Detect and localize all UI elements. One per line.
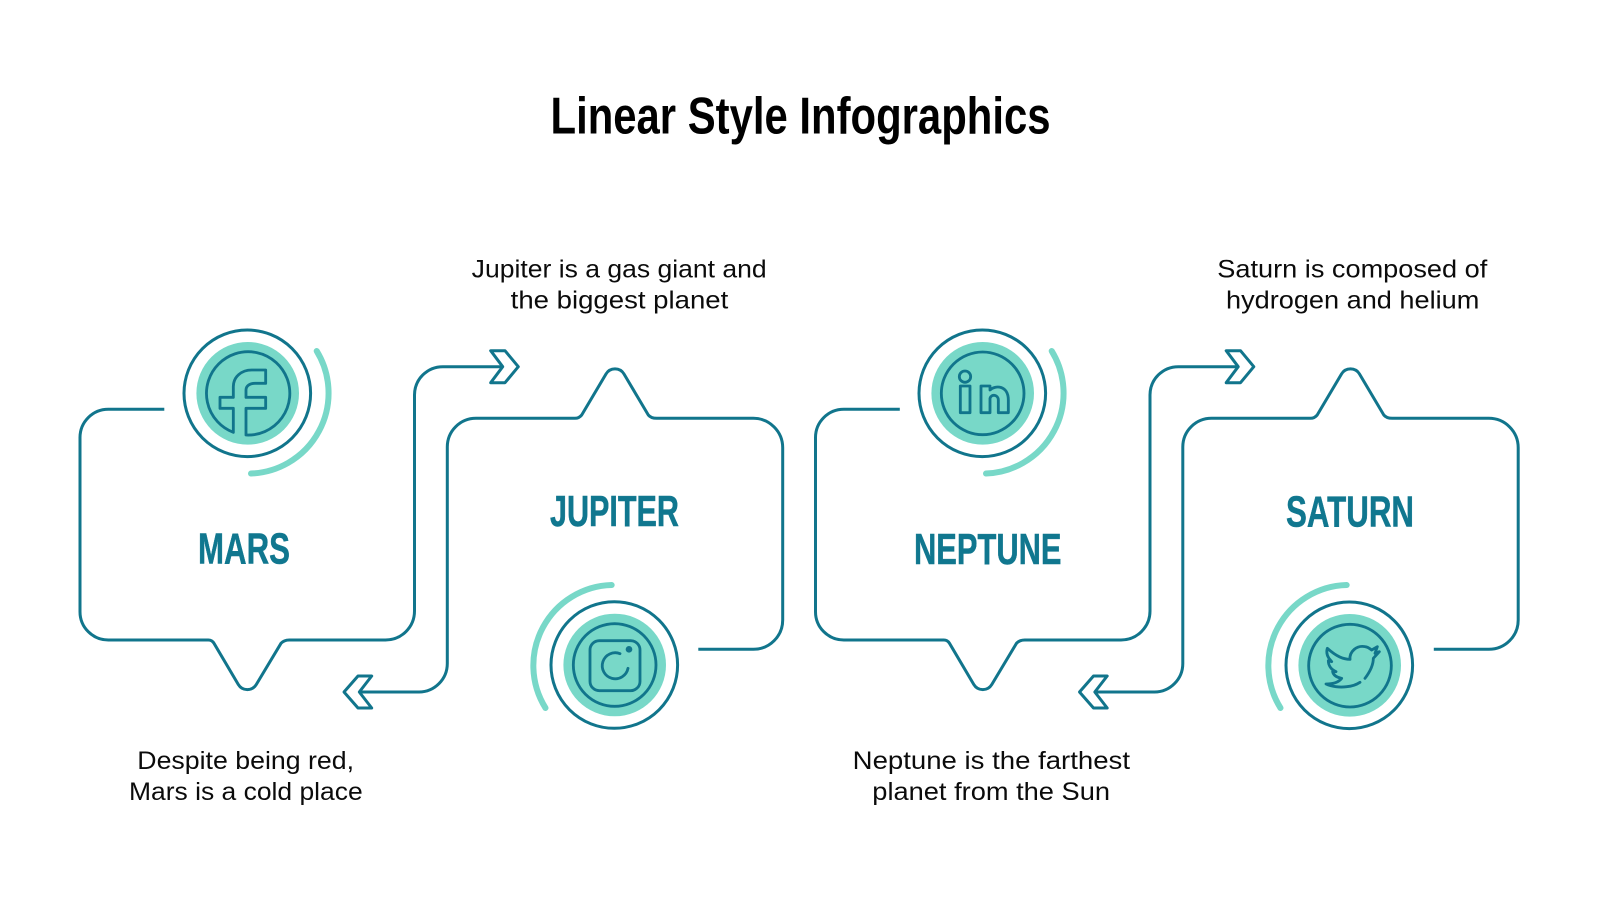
text: Neptune description xyxy=(853,747,1130,806)
text: Neptune description: planet from the Sun xyxy=(872,778,1110,806)
heading: Neptune: NEPTUNE xyxy=(914,525,1062,574)
connector outline: Jupiter xyxy=(344,369,783,708)
text: Saturn description: Saturn is composed of xyxy=(1217,256,1487,284)
connector outline: Neptune xyxy=(816,351,1254,690)
text: Jupiter description xyxy=(472,256,767,314)
icon: instagram xyxy=(533,585,678,728)
text: Neptune description: Neptune is the farthest xyxy=(853,747,1130,775)
panel: Jupiter xyxy=(344,256,783,728)
text: Jupiter description: the biggest planet xyxy=(511,286,728,314)
connector outline: Mars xyxy=(80,351,518,690)
icon: twitter xyxy=(1268,585,1413,729)
heading: Mars: MARS xyxy=(198,524,290,574)
title: Linear Style Infographics xyxy=(550,88,1050,146)
text: Mars description xyxy=(129,747,363,806)
heading: Jupiter: JUPITER xyxy=(550,487,679,536)
connector outline: Saturn xyxy=(1080,369,1518,708)
panel: Mars xyxy=(80,330,518,806)
icon: linkedin xyxy=(919,330,1064,474)
heading: Saturn: SATURN xyxy=(1286,488,1414,536)
panel: Saturn xyxy=(1080,256,1518,729)
text: Mars description: Mars is a cold place xyxy=(129,778,363,806)
panel: Neptune xyxy=(816,330,1254,806)
text: Mars description: Despite being red, xyxy=(137,747,354,775)
text: Saturn description xyxy=(1217,256,1487,314)
icon: facebook xyxy=(184,330,329,474)
text: Jupiter description: Jupiter is a gas giant and xyxy=(472,256,767,284)
text: Saturn description: hydrogen and helium xyxy=(1226,286,1479,314)
